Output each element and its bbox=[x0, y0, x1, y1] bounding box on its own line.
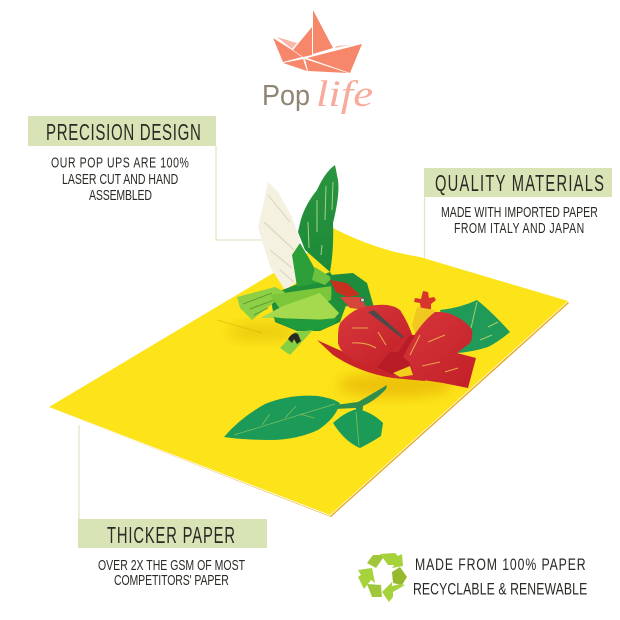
pollen column bbox=[412, 307, 435, 333]
leader line: quality materials bbox=[424, 197, 426, 259]
body text: ASSEMBLED bbox=[89, 186, 152, 203]
pop-up card bbox=[49, 228, 569, 517]
dark green belly bbox=[273, 317, 337, 330]
icon: origami boat bbox=[273, 10, 362, 73]
small leaf bbox=[333, 409, 383, 448]
white wing bbox=[258, 182, 300, 290]
logo: Poplife bbox=[262, 10, 373, 115]
middle lime body layer bbox=[260, 293, 339, 320]
heading: PRECISION DESIGN bbox=[46, 120, 201, 146]
recycling text: RECYCLABLE & RENEWABLE bbox=[413, 581, 587, 599]
soft shadow beneath bird bbox=[228, 323, 296, 341]
hibiscus flower bbox=[317, 291, 510, 388]
recycling note bbox=[358, 553, 587, 602]
stamen tip bbox=[414, 291, 436, 310]
beak bbox=[368, 310, 404, 338]
flower base fill bbox=[338, 337, 430, 381]
green leaf behind flower bbox=[440, 300, 510, 353]
neck and head bbox=[330, 273, 375, 311]
green upper wing bbox=[298, 165, 338, 272]
flower throat bbox=[377, 335, 415, 375]
large leaf bbox=[224, 396, 340, 440]
icon: recycle arrows bbox=[358, 553, 407, 602]
body text: OVER 2X THE GSM OF MOST bbox=[98, 556, 245, 573]
wordmark: Pop: Pop bbox=[262, 80, 310, 112]
heading: THICKER PAPER bbox=[107, 524, 235, 549]
body text: OUR POP UPS ARE 100% bbox=[51, 154, 189, 171]
body text: FROM ITALY AND JAPAN bbox=[454, 219, 584, 236]
recycling text: MADE FROM 100% PAPER bbox=[415, 556, 586, 575]
heading: QUALITY MATERIALS bbox=[435, 172, 604, 197]
crease shading bbox=[217, 320, 262, 333]
heading band bbox=[28, 116, 216, 146]
body text: MADE WITH IMPORTED PAPER bbox=[441, 203, 598, 220]
recycling text bbox=[413, 556, 587, 599]
callout: precision design bbox=[28, 116, 216, 203]
neck collar bbox=[312, 267, 332, 285]
leader line: precision design bbox=[216, 146, 262, 240]
body text bbox=[98, 556, 245, 588]
foot mark bbox=[288, 333, 301, 344]
small green wing bbox=[292, 243, 322, 287]
eye bbox=[360, 298, 364, 302]
heading band bbox=[424, 168, 612, 197]
wordmark: life: life bbox=[316, 74, 373, 115]
stem bbox=[335, 385, 387, 420]
foot tab bbox=[280, 330, 313, 355]
body text bbox=[441, 203, 598, 236]
body text bbox=[51, 154, 189, 203]
red throat lower bbox=[340, 297, 367, 310]
yellow center bbox=[393, 366, 413, 377]
callout: thicker paper bbox=[78, 519, 267, 588]
body base bbox=[270, 272, 348, 331]
red throat upper bbox=[330, 280, 360, 297]
leader line: thicker paper bbox=[78, 425, 80, 519]
card edge bbox=[49, 302, 569, 517]
hummingbird bbox=[237, 165, 375, 355]
upper lime body layer bbox=[270, 286, 332, 313]
heading band bbox=[78, 519, 267, 548]
body text: LASER CUT AND HAND bbox=[62, 170, 178, 187]
printed leaves on card bbox=[224, 385, 387, 448]
right petal bbox=[393, 312, 476, 388]
card page bbox=[49, 228, 568, 515]
callout: quality materials bbox=[424, 168, 612, 236]
lower left petal tail bbox=[317, 340, 393, 378]
soft shadow beneath flower bbox=[337, 372, 453, 398]
left petal bbox=[338, 305, 413, 366]
body text: COMPETITORS' PAPER bbox=[114, 571, 229, 588]
tail feathers bbox=[237, 287, 285, 320]
